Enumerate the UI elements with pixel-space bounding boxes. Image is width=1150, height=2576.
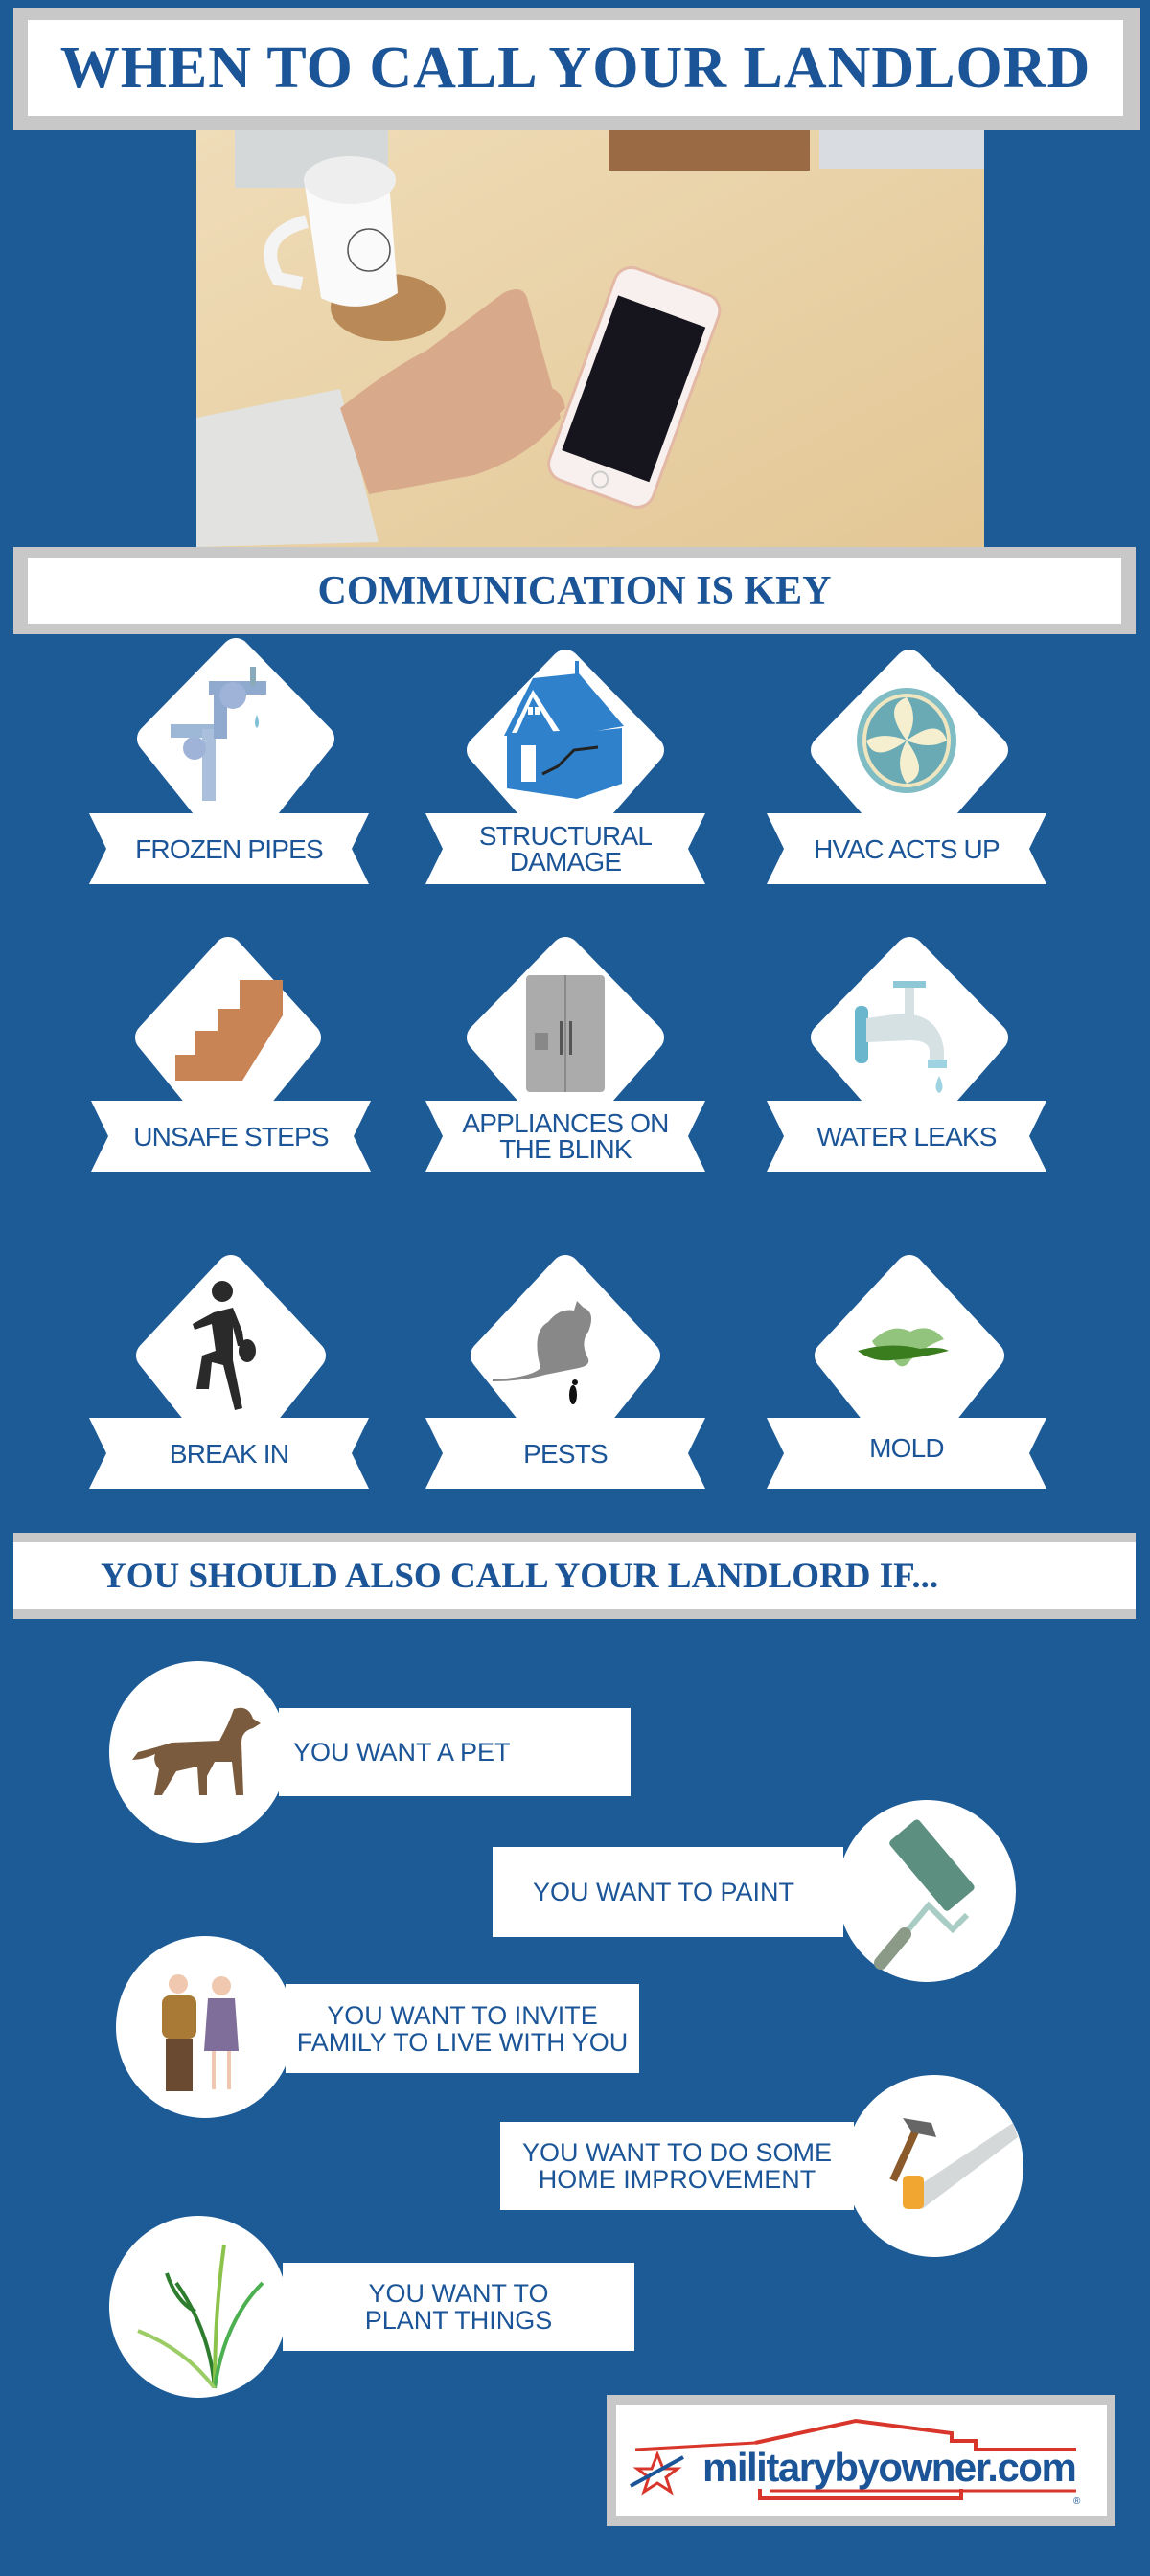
icon: dog <box>132 1707 261 1795</box>
item: home improvement: YOU WANT TO DO SOME <box>522 2138 832 2167</box>
item: plants: YOU WANT TO <box>368 2279 549 2308</box>
ribbon: structural damage: STRUCTURAL <box>479 821 652 851</box>
ribbon: pests: PESTS <box>523 1439 608 1468</box>
ribbon: frozen pipes <box>89 813 369 884</box>
heading: communication is key <box>13 547 1136 634</box>
item: plants <box>109 2216 634 2398</box>
logo: militarybyowner.com: militarybyowner.com <box>702 2445 1075 2490</box>
ribbon: appliances <box>426 1101 705 1172</box>
icon: mold <box>858 1328 949 1366</box>
icon: house <box>504 661 624 799</box>
item: pet: YOU WANT A PET <box>293 1738 511 1767</box>
ribbon: mold <box>767 1418 1046 1489</box>
ribbon: pests <box>426 1418 705 1489</box>
photo: hand holding phone <box>196 130 984 547</box>
ribbon: hvac <box>767 813 1046 884</box>
icon: burglar <box>193 1281 256 1410</box>
panel: water leaks <box>767 937 1046 1172</box>
ribbon: frozen pipes: FROZEN PIPES <box>135 833 323 864</box>
ribbon: water leaks <box>767 1101 1046 1172</box>
logo: militarybyowner.com <box>607 2395 1116 2526</box>
icon: stairs <box>175 980 283 1081</box>
icon: frozen pipes <box>171 667 266 801</box>
item: family <box>116 1936 639 2118</box>
panel: pests <box>426 1255 705 1489</box>
panel: mold <box>767 1255 1046 1489</box>
icon: faucet <box>855 981 947 1093</box>
panel: break in <box>89 1255 369 1489</box>
item: plants: PLANT THINGS <box>365 2306 552 2335</box>
item: pet <box>109 1661 631 1843</box>
icon: plant <box>137 2244 264 2388</box>
title: WHEN TO CALL YOUR LANDLORD <box>60 34 1091 100</box>
icon: rat and ant <box>493 1301 591 1404</box>
ribbon: unsafe steps <box>91 1101 371 1172</box>
panel: unsafe steps <box>91 937 371 1172</box>
heading: you should also call: YOU SHOULD ALSO CALL YOUR LANDLORD IF... <box>101 1556 938 1596</box>
item: family: YOU WANT TO INVITE <box>327 2000 598 2029</box>
ribbon: break in <box>89 1418 369 1489</box>
ribbon: break in: BREAK IN <box>170 1439 288 1468</box>
icon: couple <box>162 1974 239 2091</box>
ribbon: appliances: APPLIANCES ON <box>462 1108 669 1138</box>
ribbon: hvac: HVAC ACTS UP <box>814 833 1000 864</box>
logo: militarybyowner.com: ® <box>1073 2496 1080 2507</box>
item: paint: YOU WANT TO PAINT <box>533 1878 794 1906</box>
ribbon: structural damage <box>426 813 705 884</box>
panel: hvac <box>767 650 1046 884</box>
title <box>13 8 1140 130</box>
item: paint <box>493 1800 1016 1982</box>
panel: structural damage <box>426 650 705 884</box>
item: home improvement <box>500 2075 1024 2257</box>
icon: hammer and saw <box>889 2118 1018 2209</box>
ribbon: structural damage: DAMAGE <box>510 847 621 877</box>
item: family: FAMILY TO LIVE WITH YOU <box>297 2027 628 2056</box>
ribbon: mold: MOLD <box>869 1433 944 1462</box>
ribbon: water leaks: WATER LEAKS <box>816 1121 997 1151</box>
item: home improvement: HOME IMPROVEMENT <box>539 2165 816 2194</box>
panel: appliances <box>426 937 705 1172</box>
heading: communication is key: COMMUNICATION IS KEY <box>318 569 831 613</box>
icon: paint roller <box>874 1820 975 1970</box>
ribbon: unsafe steps: UNSAFE STEPS <box>133 1121 329 1151</box>
icon: fridge <box>526 975 605 1092</box>
ribbon: appliances: THE BLINK <box>499 1134 632 1164</box>
icon: fan <box>857 688 956 793</box>
panel: frozen pipes <box>89 638 369 884</box>
heading: you should also call <box>13 1533 1136 1619</box>
